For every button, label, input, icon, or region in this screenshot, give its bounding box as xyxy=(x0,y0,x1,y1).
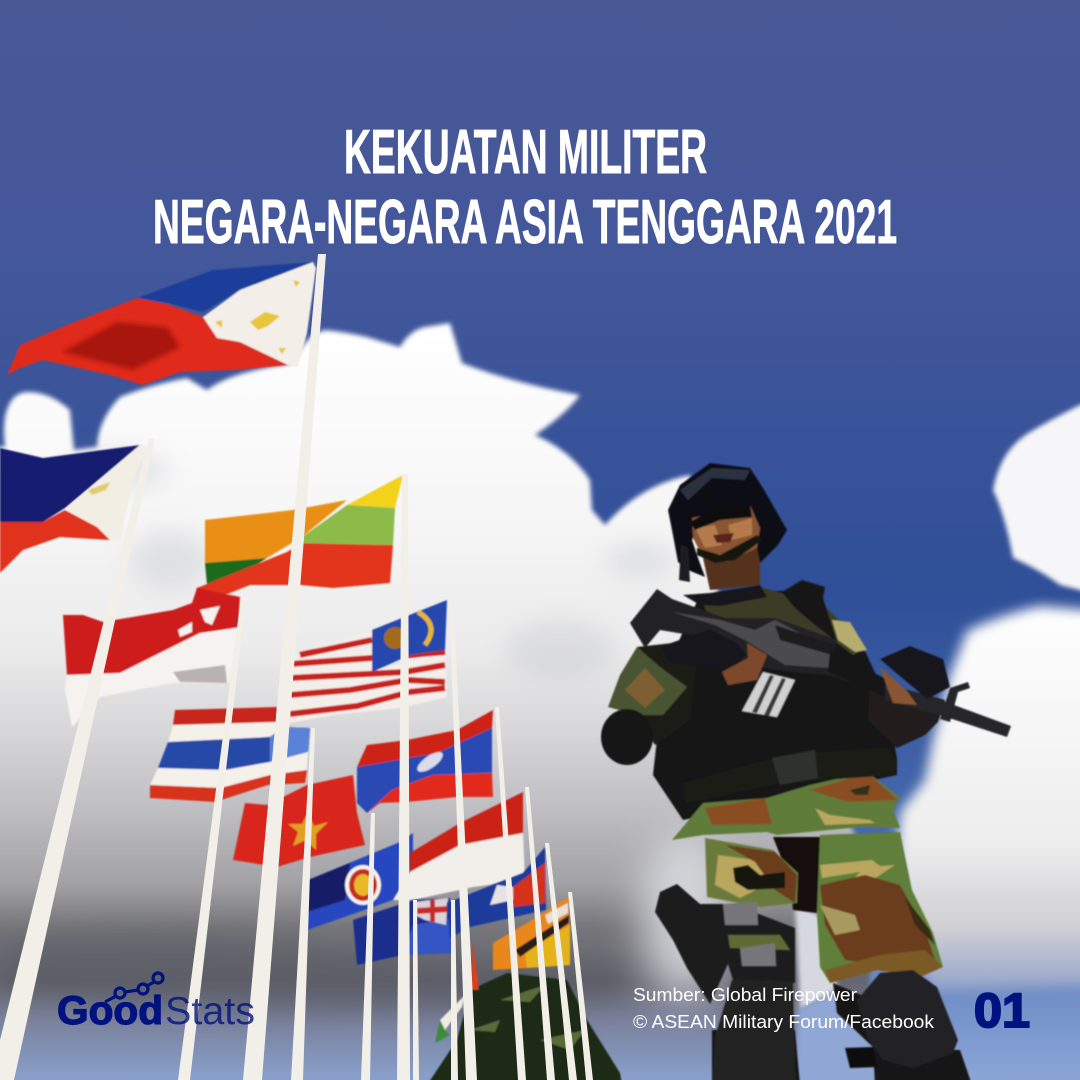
flagpoles xyxy=(0,254,593,1080)
crotch shadow xyxy=(773,837,820,913)
belt buckle xyxy=(772,750,818,785)
sunglasses xyxy=(690,505,752,530)
flag: Brunei xyxy=(493,897,570,970)
left sleeve xyxy=(608,647,687,715)
logo wordmark: Good xyxy=(57,989,163,1033)
flag: Malaysia xyxy=(290,600,447,723)
cloud upper right xyxy=(993,400,1080,595)
flag: Vietnam xyxy=(233,775,365,867)
cloud shading patches xyxy=(70,450,675,680)
flag: Myanmar xyxy=(197,475,403,605)
right hand fingers xyxy=(880,667,917,705)
clouds left xyxy=(0,323,870,1080)
shirt tail xyxy=(672,772,900,840)
flag: ASEAN xyxy=(307,833,413,930)
mouth xyxy=(713,533,734,543)
chest camouflage xyxy=(700,587,840,640)
belt xyxy=(683,747,897,803)
title: KEKUATAN MILITER xyxy=(344,118,707,187)
helmet xyxy=(668,463,787,577)
rifle magazine xyxy=(742,672,795,717)
small flag near palm xyxy=(435,940,479,1043)
page number: 01 xyxy=(974,985,1030,1038)
logo: GoodStats xyxy=(57,973,255,1033)
flag: Thailand xyxy=(150,707,310,802)
buckles xyxy=(723,902,776,966)
left hand fingers xyxy=(722,643,767,685)
left glove xyxy=(660,629,747,671)
vest and torso xyxy=(653,590,897,820)
shirt camouflage xyxy=(705,773,898,825)
logo chart line icon xyxy=(105,973,163,1002)
neck xyxy=(703,545,760,590)
helmet goggles strap xyxy=(680,468,750,500)
chin strap xyxy=(697,535,762,563)
palm tree xyxy=(427,973,622,1080)
right thigh xyxy=(817,832,943,983)
source credit: Sumber: Global Firepower xyxy=(633,984,857,1005)
flag: Laos xyxy=(357,710,493,813)
soldier xyxy=(601,463,1011,1080)
source credit: © ASEAN Military Forum/Facebook xyxy=(633,1011,935,1032)
right forearm xyxy=(868,680,945,748)
left thigh xyxy=(705,838,798,907)
flag: Australia xyxy=(353,898,452,965)
light cloud beside soldier legs xyxy=(640,830,730,1000)
elbow pad xyxy=(601,709,653,765)
holster and leg straps xyxy=(655,884,795,1004)
clouds right lower xyxy=(895,606,1080,990)
flag: Indonesia xyxy=(393,792,525,900)
flag: Cambodia xyxy=(447,847,546,938)
right shin and boot xyxy=(833,983,972,1080)
upper arm shadow xyxy=(637,640,700,745)
source credit xyxy=(633,984,935,1032)
flag: Singapore xyxy=(63,588,240,727)
rifle xyxy=(630,589,1011,737)
flag: Philippines top xyxy=(7,262,316,385)
title xyxy=(153,118,897,257)
right knee pad xyxy=(857,970,958,1068)
sky between legs xyxy=(796,990,880,1080)
light cloud between legs xyxy=(795,905,838,1010)
logo: GoodStats: Stats xyxy=(165,990,255,1033)
left knee pad xyxy=(712,980,797,1080)
left thigh camouflage xyxy=(715,845,797,903)
face xyxy=(692,505,760,562)
shoulder strap xyxy=(782,580,837,642)
foregrip xyxy=(810,683,843,719)
holster camo sliver xyxy=(728,935,790,950)
right thigh camouflage xyxy=(820,860,943,983)
flag: Philippines second xyxy=(0,445,147,573)
collar xyxy=(683,585,767,606)
right glove xyxy=(880,646,950,699)
lower left leg xyxy=(712,1030,800,1080)
helmet flap xyxy=(679,545,690,582)
right shoulder camouflage xyxy=(827,608,867,655)
boot strap xyxy=(845,1047,877,1068)
dark cloud base xyxy=(0,933,620,1013)
